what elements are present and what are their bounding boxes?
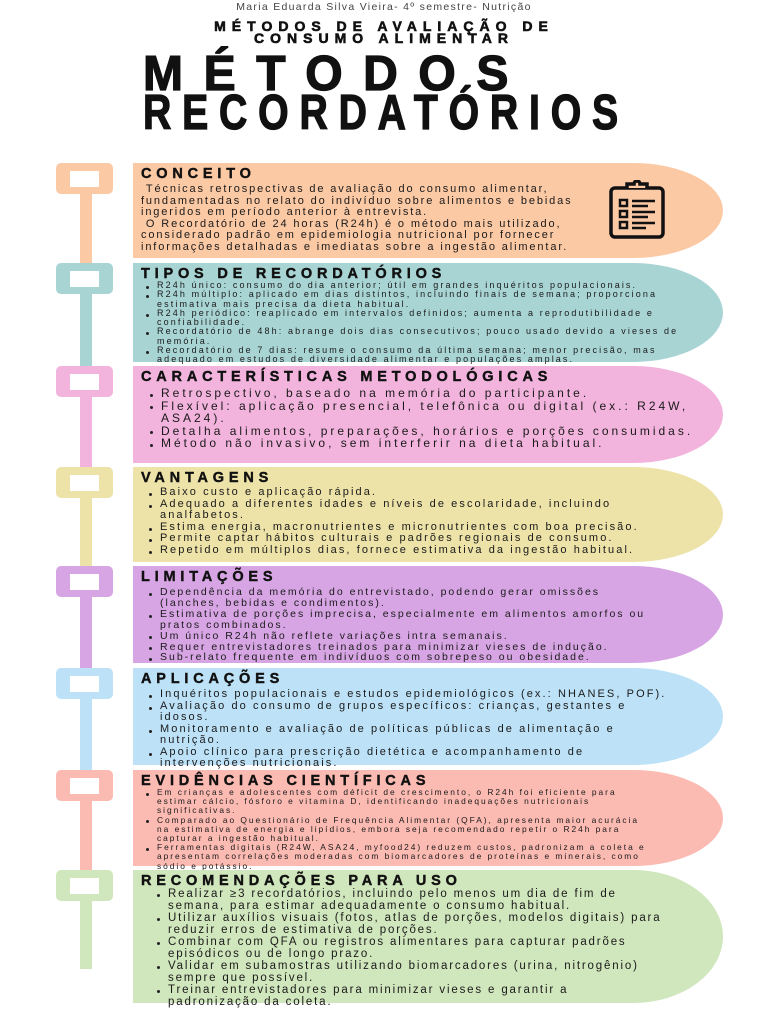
- panel: recomendacoes para uso: sempre que possível.: [168, 972, 314, 984]
- marker: limitacoes: [56, 566, 113, 597]
- panel: tipos de recordatorios: adequado em estudos de diversidade alimentar e populações amplas.: [157, 354, 574, 364]
- panel: conceito: O Recordatório de 24 horas (R24h) é o método mais utilizado,: [146, 218, 561, 230]
- panel: tipos de recordatorios: [133, 263, 723, 362]
- panel: aplicacoes: nutrição.: [160, 734, 221, 746]
- panel: conceito: fundamentadas no relato do indivíduo sobre alimentos e bebidas: [141, 194, 572, 206]
- panel: recomendacoes para uso: reduzir erros de estimativa de porções.: [168, 924, 439, 936]
- panel: recomendacoes para uso: Validar em subamostras utilizando biomarcadores (urina, nitrogênio): [168, 960, 639, 972]
- panel: tipos de recordatorios: memória.: [157, 336, 211, 346]
- stems (timeline): [80, 194, 92, 264]
- panel: vantagens: VANTAGENS: [141, 470, 273, 486]
- marker: vantagens: [56, 467, 113, 498]
- panel: vantagens: [133, 467, 723, 562]
- panel: tipos de recordatorios: TIPOS DE RECORDATÓRIOS: [141, 266, 446, 282]
- panel: aplicacoes: idosos.: [160, 711, 209, 723]
- panel: tipos de recordatorios: R24h múltiplo: aplicado em dias distintos, incluindo finais de semana; proporciona: [157, 289, 657, 299]
- marker: tipos: [56, 263, 113, 294]
- panel: evidencias cientificas: Comparado ao Questionário de Frequência Alimentar (QFA), apresenta maior acurácia: [157, 815, 639, 825]
- panel: aplicacoes: intervenções nutricionais.: [160, 757, 338, 769]
- title line 2: RECORDATÓRIOS: [143, 86, 629, 140]
- marker: evidencias: [56, 770, 113, 801]
- panel: caracteristicas metodologicas: Flexível: aplicação presencial, telefônica ou digital (ex.: R24W,: [161, 398, 688, 412]
- subtitle: [214, 18, 554, 46]
- marker: recomendacoes: [56, 870, 113, 901]
- panel: recomendacoes para uso: Realizar ≥3 recordatórios, incluindo pelo menos um dia de fim de: [168, 888, 617, 900]
- marker: caracteristicas: [56, 366, 113, 397]
- panel: evidencias cientificas: significativas.: [157, 805, 236, 815]
- panel: caracteristicas metodologicas: Detalha alimentos, preparações, horários e porções consumidas.: [161, 424, 693, 438]
- panel: tipos de recordatorios: Recordatório de 48h: abrange dois dias consecutivos; pouco usado devido a vieses de: [157, 326, 678, 336]
- panel: vantagens: Estima energia, macronutrientes e micronutrientes com boa precisão.: [160, 521, 639, 533]
- panel: evidencias cientificas: estimar cálcio, fósforo e vitamina D, identificando inadequações nutricionais: [157, 796, 590, 806]
- panel: limitacoes: (lanches, bebidas e condimentos).: [160, 597, 386, 609]
- marker: aplicacoes: [56, 668, 113, 699]
- panel: recomendacoes para uso: RECOMENDAÇÕES PARA USO: [141, 873, 462, 889]
- panel: aplicacoes: [133, 668, 723, 765]
- panel: recomendacoes para uso: Combinar com QFA ou registros alimentares para capturar padrões: [168, 936, 627, 948]
- panel: limitacoes: Requer entrevistadores treinados para minimizar vieses de indução.: [160, 641, 609, 653]
- panel: aplicacoes: Monitoramento e avaliação de políticas públicas de alimentação e: [160, 722, 615, 734]
- panel: conceito: Técnicas retrospectivas de avaliação do consumo alimentar,: [146, 183, 548, 195]
- panel: evidencias cientificas: [133, 770, 723, 866]
- panel: evidencias cientificas: Ferramentas digitais (R24W, ASA24, myfood24) reduzem custos, padronizam a coleta e: [157, 842, 646, 852]
- panel: limitacoes: [133, 566, 723, 663]
- panel: conceito: CONCEITO: [141, 166, 256, 182]
- panel: recomendacoes para uso: Utilizar auxílios visuais (fotos, atlas de porções, modelos digitais) para: [168, 912, 661, 924]
- panel: evidencias cientificas: Em crianças e adolescentes com déficit de crescimento, o R24h foi eficiente para: [157, 787, 617, 797]
- panel: recomendacoes para uso: episódicos ou de longo prazo.: [168, 948, 374, 960]
- title line 1: MÉTODOS: [143, 47, 529, 101]
- panel: vantagens: Baixo custo e aplicação rápida.: [160, 486, 377, 498]
- panel: tipos de recordatorios: Recordatório de 7 dias: resume o consumo da última semana; menor precisão, mas: [157, 345, 657, 355]
- author line: Maria Eduarda Silva Vieira- 4º semestre- Nutrição: [236, 1, 532, 13]
- panel: vantagens: Repetido em múltiplos dias, fornece estimativa da ingestão habitual.: [160, 544, 634, 556]
- panel: tipos de recordatorios: R24h único: consumo do dia anterior; útil em grandes inquéritos populacionais.: [157, 280, 637, 290]
- panel: evidencias cientificas: capturar a ingestão habitual.: [157, 833, 320, 843]
- panel: caracteristicas metodologicas: [133, 366, 723, 463]
- panel: evidencias cientificas: na estimativa de energia e lipídios, embora seja recomendado repetir o R24h para: [157, 824, 620, 834]
- panel: conceito: ingeridos em período anterior à entrevista.: [141, 206, 428, 218]
- panel: vantagens: analfabetos.: [160, 509, 245, 521]
- panel: evidencias cientificas: sódio e potássio.: [157, 861, 253, 871]
- panel: aplicacoes: APLICAÇÕES: [141, 671, 284, 687]
- marker: conceito: [56, 163, 113, 194]
- panel: vantagens: Permite captar hábitos culturais e padrões regionais de consumo.: [160, 532, 614, 544]
- panel: aplicacoes: Apoio clínico para prescrição dietética e acompanhamento de: [160, 746, 584, 758]
- panel: limitacoes: Dependência da memória do entrevistado, podendo gerar omissões: [160, 586, 600, 598]
- panel: caracteristicas metodologicas: Método não invasivo, sem interferir na dieta habitual.: [161, 436, 604, 450]
- panel: evidencias cientificas: EVIDÊNCIAS CIENTÍFICAS: [141, 773, 430, 789]
- panel: evidencias cientificas: apresentam correlações moderadas com biomarcadores de proteínas e minerais, como: [157, 851, 640, 861]
- panel: conceito: informações detalhadas e imediatas sobre a ingestão alimentar.: [141, 240, 568, 252]
- subtitle: CONSUMO ALIMENTAR: [254, 30, 514, 46]
- panel: recomendacoes para uso: semana, para estimar adequadamente o consumo habitual.: [168, 900, 571, 912]
- subtitle: MÉTODOS DE AVALIAÇÃO DE: [214, 18, 554, 34]
- panel: caracteristicas metodologicas: CARACTERÍSTICAS METODOLÓGICAS: [141, 369, 552, 385]
- panel: recomendacoes para uso: [133, 870, 723, 1003]
- panel: caracteristicas metodologicas: Retrospectivo, baseado na memória do participante.: [161, 386, 589, 400]
- panel: tipos de recordatorios: confiabilidade.: [157, 317, 246, 327]
- panel: vantagens: Adequado a diferentes idades e níveis de escolaridade, incluindo: [160, 498, 611, 510]
- panel: tipos de recordatorios: estimativa mais precisa da dieta habitual.: [157, 299, 410, 309]
- panel: recomendacoes para uso: Treinar entrevistadores para minimizar vieses e garantir a: [168, 984, 568, 996]
- panel: aplicacoes: Avaliação do consumo de grupos específicos: crianças, gestantes e: [160, 700, 626, 712]
- panel: limitacoes: LIMITAÇÕES: [141, 569, 277, 585]
- icon: clipboard: [609, 180, 665, 239]
- panel: limitacoes: Sub-relato frequente em indivíduos com sobrepeso ou obesidade.: [160, 651, 591, 663]
- panel: conceito: [133, 163, 723, 258]
- panel: limitacoes: Estimativa de porções imprecisa, especialmente em alimentos amorfos ou: [160, 608, 645, 620]
- panel: limitacoes: pratos combinados.: [160, 619, 288, 631]
- panel: limitacoes: Um único R24h não reflete variações intra semanais.: [160, 630, 509, 642]
- panel: conceito: considerado padrão em epidemiologia nutricional por fornecer: [141, 229, 555, 241]
- panel: tipos de recordatorios: R24h periódico: reaplicado em intervalos definidos; aumenta a reprodutibilidade e: [157, 308, 654, 318]
- panel: recomendacoes para uso: padronização da coleta.: [168, 996, 332, 1008]
- panel: caracteristicas metodologicas: ASA24).: [161, 411, 227, 425]
- panel: aplicacoes: Inquéritos populacionais e estudos epidemiológicos (ex.: NHANES, POF).: [160, 688, 666, 700]
